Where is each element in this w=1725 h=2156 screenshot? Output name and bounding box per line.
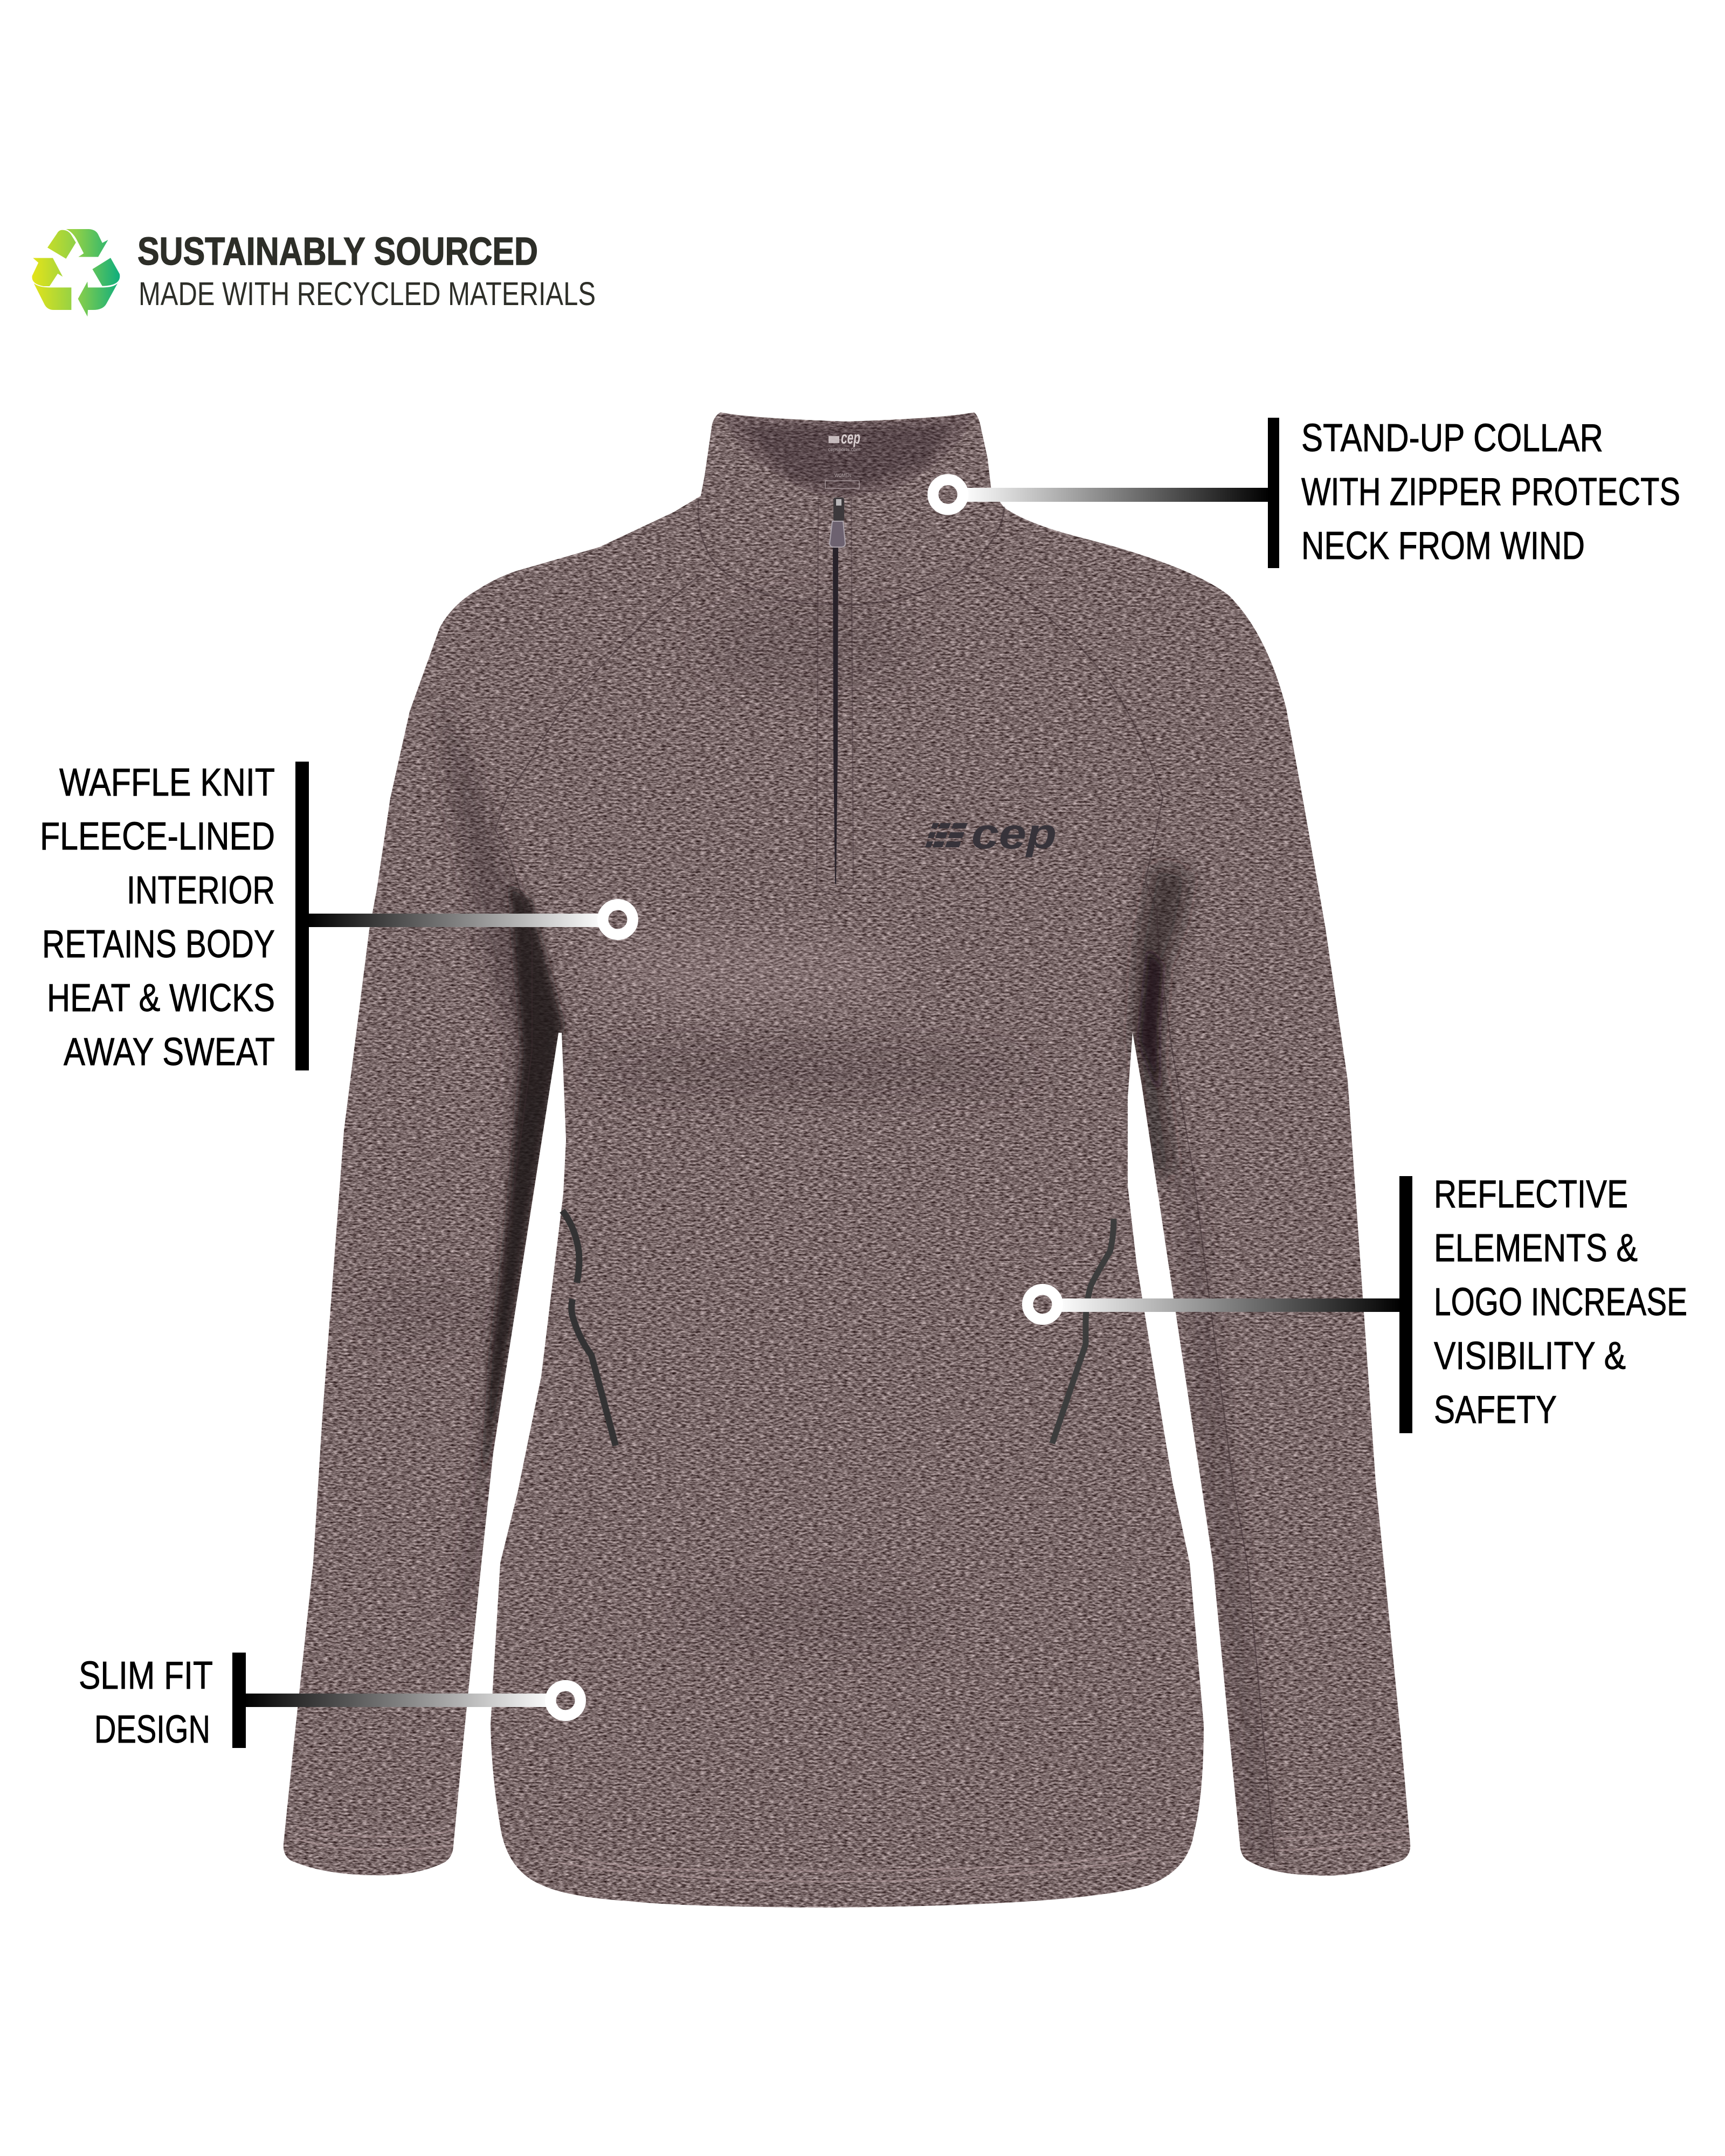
callout text: DESIGN (94, 1708, 210, 1751)
callout text: WAFFLE KNIT (59, 761, 275, 804)
callout text: STAND-UP COLLAR (1301, 416, 1603, 460)
callout: slim fit (79, 1653, 581, 1751)
collar tag: WOMEN (834, 473, 851, 478)
collar tag: cep (841, 428, 860, 447)
callout text: NECK FROM WIND (1301, 524, 1585, 568)
collar tag: cepsports.com (828, 447, 860, 452)
callout text (1434, 1172, 1687, 1432)
callout text (79, 1654, 213, 1751)
neck opening edge (721, 413, 974, 497)
icon: recycling arrows (32, 229, 120, 316)
connector line (244, 1694, 554, 1707)
callout text: SAFETY (1434, 1388, 1557, 1432)
bracket bar (232, 1653, 246, 1748)
shirt fabric (270, 404, 1423, 1913)
shirt shading (356, 426, 1278, 1860)
chest logo (925, 810, 1057, 858)
marker ring (550, 1685, 581, 1716)
callout: waffle knit fleece (40, 761, 633, 1074)
bracket bar (295, 762, 309, 1070)
connector line (1057, 1298, 1402, 1312)
logo wordmark: cep (971, 810, 1057, 858)
callout text (1301, 416, 1680, 568)
reflective strip left (562, 1211, 616, 1446)
bracket bar (1268, 418, 1279, 568)
seams (493, 499, 1275, 1860)
marker ring (1027, 1289, 1058, 1319)
bracket bar (1399, 1176, 1412, 1433)
badge heading: SUSTAINABLY SOURCED (137, 230, 538, 273)
marker ring (933, 480, 963, 509)
callout text: INTERIOR (127, 868, 275, 912)
marker ring (603, 904, 633, 935)
callout text: SLIM FIT (79, 1654, 213, 1697)
reflective strip right (1052, 1219, 1114, 1443)
callout: reflective elements (1027, 1172, 1687, 1433)
product image: quarter-zip shirt (270, 404, 1423, 1913)
badge subheading: MADE WITH RECYCLED MATERIALS (139, 275, 596, 312)
callout text (40, 761, 275, 1074)
callout text: RETAINS BODY (42, 922, 275, 966)
connector line (307, 914, 605, 927)
logo grid (925, 823, 968, 847)
connector line (962, 488, 1269, 502)
zipper (830, 497, 845, 884)
collar tag (825, 428, 860, 488)
callout text: ELEMENTS & (1434, 1226, 1638, 1270)
callout text: HEAT & WICKS (47, 976, 275, 1020)
callout text: REFLECTIVE (1434, 1172, 1628, 1216)
cuff and hem stitching (296, 1827, 1409, 1882)
callout text: AWAY SWEAT (64, 1030, 275, 1074)
callout text: FLEECE-LINED (40, 814, 275, 858)
badge: sustainably sourced (32, 229, 596, 316)
callout: stand-up collar (933, 416, 1680, 568)
callout text: VISIBILITY & (1434, 1334, 1626, 1378)
